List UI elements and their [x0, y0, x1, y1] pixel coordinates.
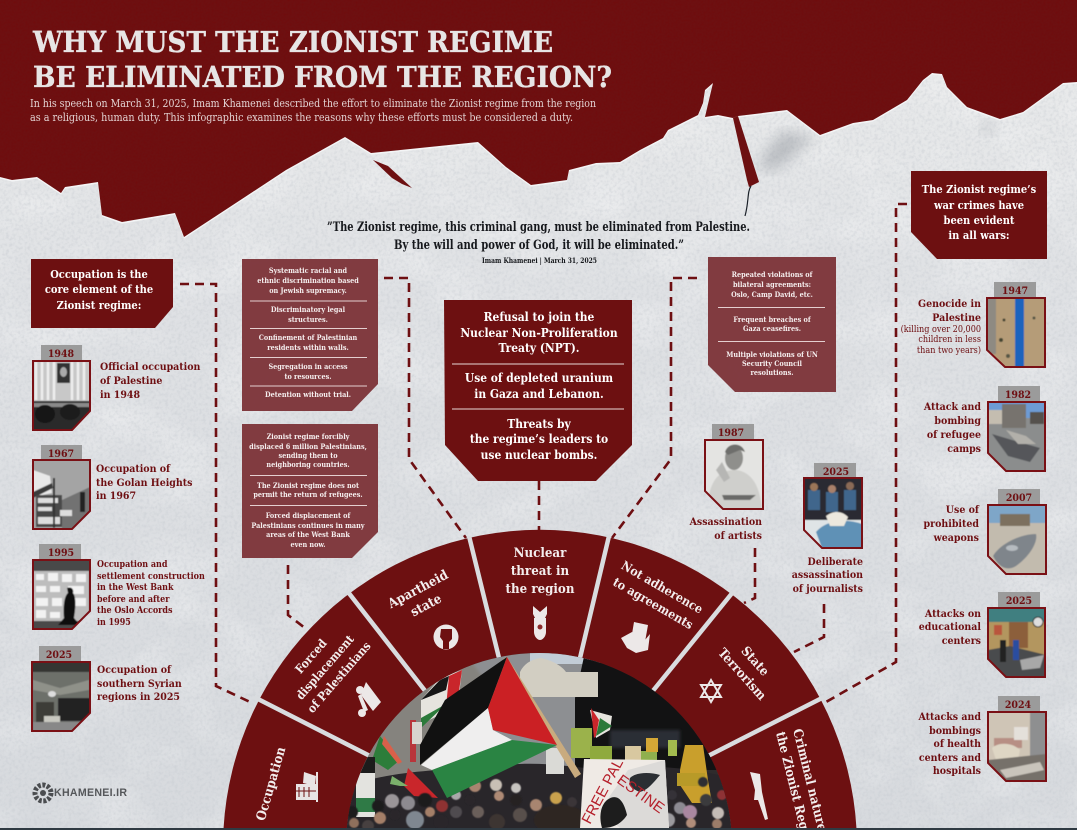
bottom edge strip: [0, 828, 1077, 830]
panel: nuclear threat details: in Gaza and Lebanon.: [474, 387, 604, 401]
title: [32, 25, 612, 94]
panel: violated agreements details: Multiple violations of UN: [726, 350, 818, 359]
segment: Nuclear threat: threat in: [511, 564, 570, 579]
segment: Forced displacement: of Palestinians: [304, 639, 374, 716]
war crime: refugee camps 1982: bombing: [934, 415, 981, 427]
segment: State Terrorism: State: [738, 644, 772, 679]
timeline item: 1948: Official occupation: [100, 361, 201, 373]
panel: violated agreements details: resolutions.: [751, 368, 793, 377]
war crime: educational centers 2025: centers: [942, 635, 981, 647]
timeline item: 1948: in 1948: [100, 389, 140, 401]
war crime: genocide 1947: Genocide in: [918, 298, 981, 310]
war crime: prohibited weapons 2007: Use of: [946, 504, 980, 516]
panel: nuclear threat details: use nuclear bombs.: [481, 448, 597, 462]
segment: Not adherence to agreements: to agreements: [611, 574, 696, 632]
panel: nuclear threat details: Use of depleted uranium: [465, 371, 614, 385]
timeline item: 1995: settlement construction: [97, 572, 205, 582]
panel: violated agreements details: bilateral agreements:: [733, 280, 811, 289]
timeline item: 1995: [32, 544, 205, 630]
timeline item: 1948: [33, 345, 201, 431]
item: assassination of journalists 2025: Deliberate: [808, 556, 863, 568]
war crime: genocide 1947: (killing over 20,000: [901, 324, 981, 335]
timeline item: 1995: Occupation and: [97, 560, 168, 570]
quote: ”The Zionist regime, this criminal gang, must be eliminated from Palestine.: [327, 220, 750, 235]
crowd heads: [346, 777, 727, 830]
logo: KHAMENEI.IR: KHAMENEI.IR: [54, 787, 127, 799]
quote: [327, 220, 750, 265]
panel: violated agreements details: Security Council: [742, 359, 803, 368]
panel: nuclear threat details: Nuclear Non-Proliferation: [460, 326, 618, 340]
war crime: genocide 1947: [901, 282, 1046, 368]
war crime: refugee camps 1982: 1982: [1005, 389, 1031, 401]
panel: occupation header: Occupation is the: [50, 268, 148, 281]
timeline item: 1995: in the West Bank: [97, 583, 174, 593]
panel: apartheid details: Segregation in access: [268, 362, 348, 371]
war crime: hospitals 2024: 2024: [1005, 699, 1032, 711]
panel: forced displacement details: displaced 6 million Palestinians,: [249, 442, 367, 451]
segment: Apartheid state: [385, 567, 458, 650]
banner: free Palestine: [579, 756, 669, 828]
panel: war crimes header: The Zionist regime’s: [922, 183, 1037, 196]
panel: violated agreements details: Frequent breaches of: [733, 315, 812, 324]
panel: apartheid details: Systematic racial and: [269, 266, 348, 275]
war crime: prohibited weapons 2007: prohibited: [923, 518, 979, 530]
panel: forced displacement details: permit the return of refugees.: [253, 490, 363, 499]
panel: apartheid details: to resources.: [284, 372, 332, 381]
item: assassination of artists 1987: [689, 424, 764, 542]
panel: apartheid details: Confinement of Palestinian: [259, 333, 358, 342]
panel: war crimes header: been evident: [944, 214, 1015, 227]
main Palestinian flag: [420, 657, 581, 798]
icon: occupied building: [296, 772, 318, 802]
timeline item: 1967: [32, 445, 192, 530]
segment: Not adherence to agreements: [611, 558, 706, 653]
torn red header band: [0, 0, 1077, 240]
panel: forced displacement details: Zionist regime forcibly: [267, 432, 350, 441]
segment: Nuclear threat: [506, 546, 575, 640]
segment: Nuclear threat: the region: [506, 582, 575, 597]
icon: raised fist: [434, 624, 458, 650]
panel: occupation header: Zionist regime:: [57, 299, 141, 312]
fan chart of reasons: [224, 530, 856, 830]
panel: forced displacement details: The Zionist regime does not: [257, 481, 359, 490]
item: assassination of journalists 2025: assassination: [792, 569, 863, 581]
panel: occupation header: core element of the: [45, 283, 153, 296]
panel: nuclear threat details: Refusal to join the: [484, 310, 595, 324]
timeline item: 1967: 1967: [48, 448, 74, 460]
title: WHY MUST THE ZIONIST REGIME: [32, 25, 553, 59]
panel: forced displacement details: [242, 424, 378, 558]
panel: violated agreements details: Repeated violations of: [732, 270, 814, 279]
timeline item: 1995: 1995: [48, 547, 74, 559]
panel: war crimes header: war crimes have: [933, 199, 1024, 212]
panel: forced displacement details: Forced displacement of: [266, 511, 352, 520]
banner: free Palestine: ESTINE: [614, 771, 667, 817]
timeline item: 1967: in 1967: [96, 490, 136, 502]
timeline item: 1948: 1948: [48, 348, 75, 360]
war crime: refugee camps 1982: of refugee: [927, 429, 981, 441]
panel: nuclear threat details: Treaty (NPT).: [499, 341, 579, 355]
war crime: hospitals 2024: bombings: [929, 725, 981, 737]
icon: rifle: [750, 772, 768, 820]
panel: forced displacement details: Palestinians continues in many: [251, 521, 365, 530]
panel: apartheid details: Discriminatory legal: [271, 305, 346, 314]
icon: keys and bag: [356, 682, 381, 717]
item: assassination of artists 1987: Assassination: [689, 516, 762, 528]
icon: handshake: [621, 622, 650, 653]
segment: Nuclear threat: Nuclear: [514, 546, 567, 561]
timeline item: 1948: of Palestine: [100, 375, 162, 387]
icon: star of David: [701, 680, 721, 702]
war crime: hospitals 2024: centers and: [919, 752, 981, 764]
war crime: prohibited weapons 2007: [923, 489, 1046, 575]
war crime: genocide 1947: 1947: [1002, 285, 1028, 297]
timeline item: 2025 Syria: 2025: [46, 649, 72, 661]
timeline item: 1995: before and after: [97, 595, 170, 605]
segment: State Terrorism: Terrorism: [714, 646, 769, 704]
panel: violated agreements details: [708, 257, 836, 392]
segment: Criminal nature: Criminal nature: [789, 727, 829, 830]
segment: Occupation: [256, 748, 318, 820]
intro text: In his speech on March 31, 2025, Imam Khamenei described the effort to eliminate the Zionist regime from the region: [30, 97, 597, 110]
war crime: refugee camps 1982: Attack and: [923, 401, 981, 413]
war crime: refugee camps 1982: camps: [947, 443, 981, 455]
panel: nuclear threat details: the regime’s leaders to: [470, 432, 608, 446]
segment: Forced displacement: displacement: [293, 632, 357, 703]
war crime: educational centers 2025: [919, 592, 1046, 680]
quote: By the will and power of God, it will be eliminated.”: [394, 238, 684, 253]
connector dashes: [180, 204, 907, 702]
central photo: protest with Palestinian flag: [340, 650, 740, 830]
timeline item: 1995: in 1995: [97, 618, 131, 628]
timeline item: 1967: Occupation of: [96, 463, 171, 475]
crowd base: [340, 764, 740, 830]
panel: forced displacement details: sending them to: [278, 451, 338, 460]
segment: Apartheid state: Apartheid: [385, 567, 452, 612]
logo: KHAMENEI.IR: [35, 785, 127, 801]
war crime: educational centers 2025: Attacks on: [924, 608, 981, 620]
war crime: prohibited weapons 2007: 2007: [1006, 492, 1032, 504]
timeline item: 2025 Syria: Occupation of: [97, 664, 172, 676]
war crime: genocide 1947: than two years): [917, 345, 981, 356]
item: assassination of journalists 2025: 2025: [823, 466, 849, 478]
intro text: as a religious, human duty. This infographic examines the reasons why these efforts must be considered a duty.: [30, 111, 573, 124]
icon: nuclear bomb: [533, 606, 547, 640]
war crime: refugee camps 1982: [923, 386, 1046, 472]
item: assassination of journalists 2025: [792, 463, 863, 595]
panel: apartheid details: residents within walls.: [267, 343, 349, 352]
war crime: genocide 1947: Palestine: [932, 312, 981, 324]
war crime: prohibited weapons 2007: weapons: [933, 532, 979, 544]
segment: Criminal nature: [750, 727, 829, 830]
title: BE ELIMINATED FROM THE REGION?: [33, 60, 612, 94]
item: assassination of artists 1987: of artists: [714, 530, 762, 542]
war crime: hospitals 2024: [918, 696, 1047, 782]
protest signs: [356, 728, 712, 817]
panel: occupation header: [31, 259, 173, 328]
panel: forced displacement details: even now.: [290, 540, 326, 549]
war crime: hospitals 2024: of health: [934, 738, 981, 750]
timeline item: 2025 Syria: regions in 2025: [97, 691, 180, 703]
panel: violated agreements details: Oslo, Camp David, etc.: [731, 290, 813, 299]
timeline item: 2025 Syria: [32, 646, 182, 732]
item: assassination of journalists 2025: of journalists: [793, 583, 863, 595]
panel: nuclear threat details: Threats by: [507, 417, 572, 431]
background small flags: [372, 670, 612, 770]
quote: Imam Khamenei | March 31, 2025: [482, 256, 597, 265]
timeline item: 1995: the Oslo Accords: [97, 606, 173, 616]
segment: Occupation: Occupation: [254, 745, 289, 823]
paper rift left: [373, 160, 412, 188]
timeline item: 1967: the Golan Heights: [96, 477, 192, 489]
panel: forced displacement details: neighboring countries.: [266, 460, 350, 469]
panel: apartheid details: [242, 259, 378, 411]
war crime: hospitals 2024: Attacks and: [918, 711, 981, 723]
panel: forced displacement details: areas of the West Bank: [266, 530, 350, 539]
panel: war crimes header: in all wars:: [948, 229, 1010, 242]
panel: apartheid details: structures.: [288, 315, 328, 324]
war crime: hospitals 2024: hospitals: [933, 765, 981, 777]
panel: war crimes header: [911, 171, 1047, 259]
panel: apartheid details: on Jewish supremacy.: [269, 286, 347, 295]
paper rift right: [733, 116, 759, 216]
banner: free Palestine: FREE PAL: [579, 756, 627, 827]
panel: apartheid details: Detention without trial.: [265, 390, 351, 399]
segment: Not adherence to agreements: Not adherence: [619, 558, 706, 617]
intro text: [30, 97, 597, 124]
panel: apartheid details: ethnic discrimination based: [257, 276, 359, 285]
panel: violated agreements details: Gaza ceasefires.: [743, 324, 801, 333]
war crime: educational centers 2025: 2025: [1006, 595, 1032, 607]
segment: Apartheid state: state: [408, 591, 445, 620]
segment: Forced displacement: Forced: [292, 636, 330, 676]
item: assassination of artists 1987: 1987: [718, 427, 744, 439]
war crime: genocide 1947: children in less: [918, 335, 981, 345]
war crime: educational centers 2025: educational: [919, 621, 981, 633]
panel: nuclear threat details: [444, 300, 632, 481]
timeline item: 2025 Syria: southern Syrian: [97, 678, 182, 690]
